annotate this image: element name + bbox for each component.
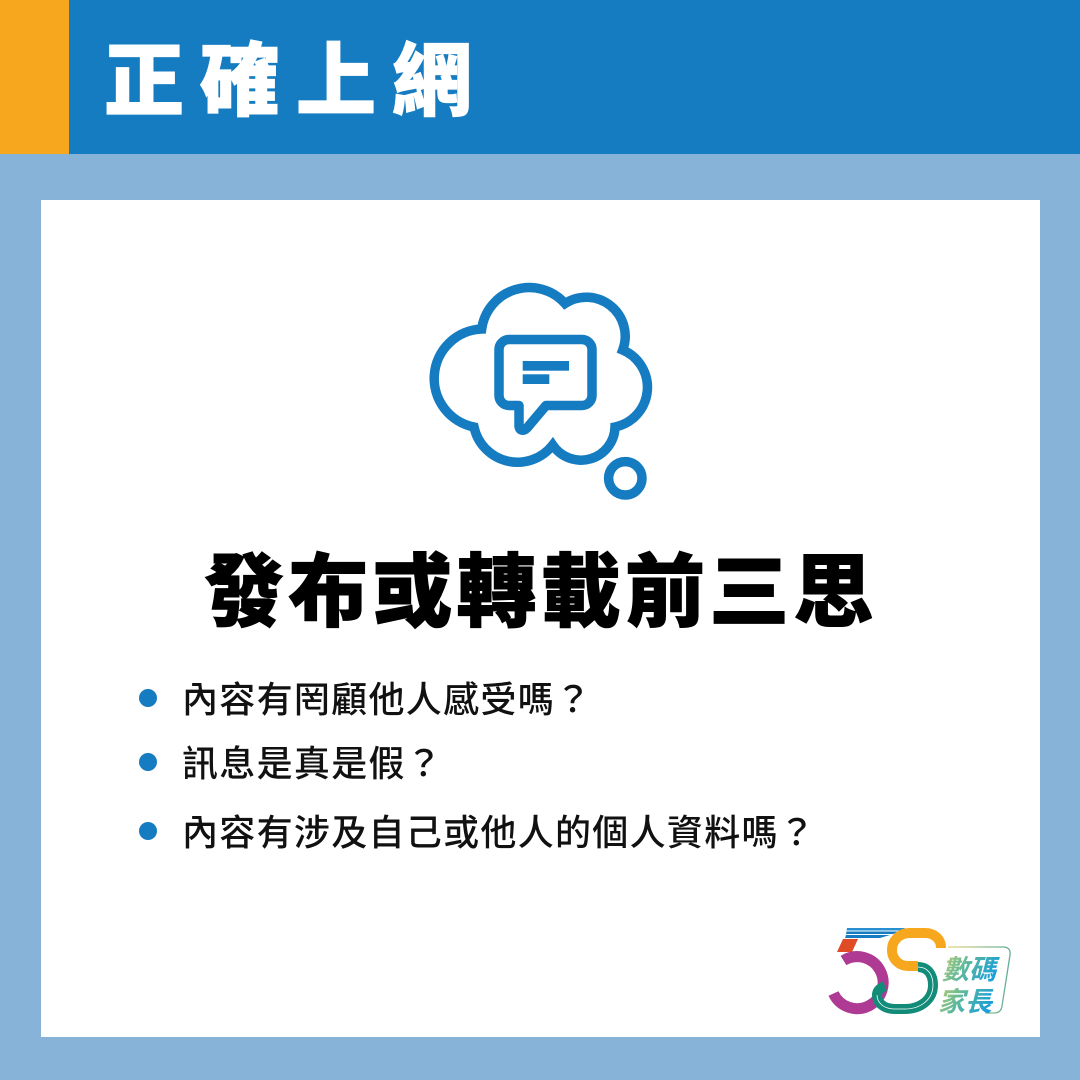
bullet list [139, 679, 816, 853]
icon: thought cloud with speech bubble [429, 282, 652, 500]
bullet 2: 訊息是真是假？ [182, 743, 443, 784]
header bar [0, 0, 1080, 154]
orange accent block [0, 0, 69, 154]
main heading: 發布或轉載前三思 [204, 548, 878, 637]
logo: 55 digital parents: 數碼 [942, 948, 1000, 987]
title: 正確上網 [104, 37, 488, 126]
logo: 55 digital parents: 家長 [938, 980, 994, 1019]
white content panel [41, 200, 1040, 1037]
bullet 1: 內容有罔顧他人感受嗎？ [182, 679, 592, 720]
logo: 55 digital parents [828, 928, 1011, 1019]
bullet 3: 內容有涉及自己或他人的個人資料嗎？ [182, 812, 816, 853]
